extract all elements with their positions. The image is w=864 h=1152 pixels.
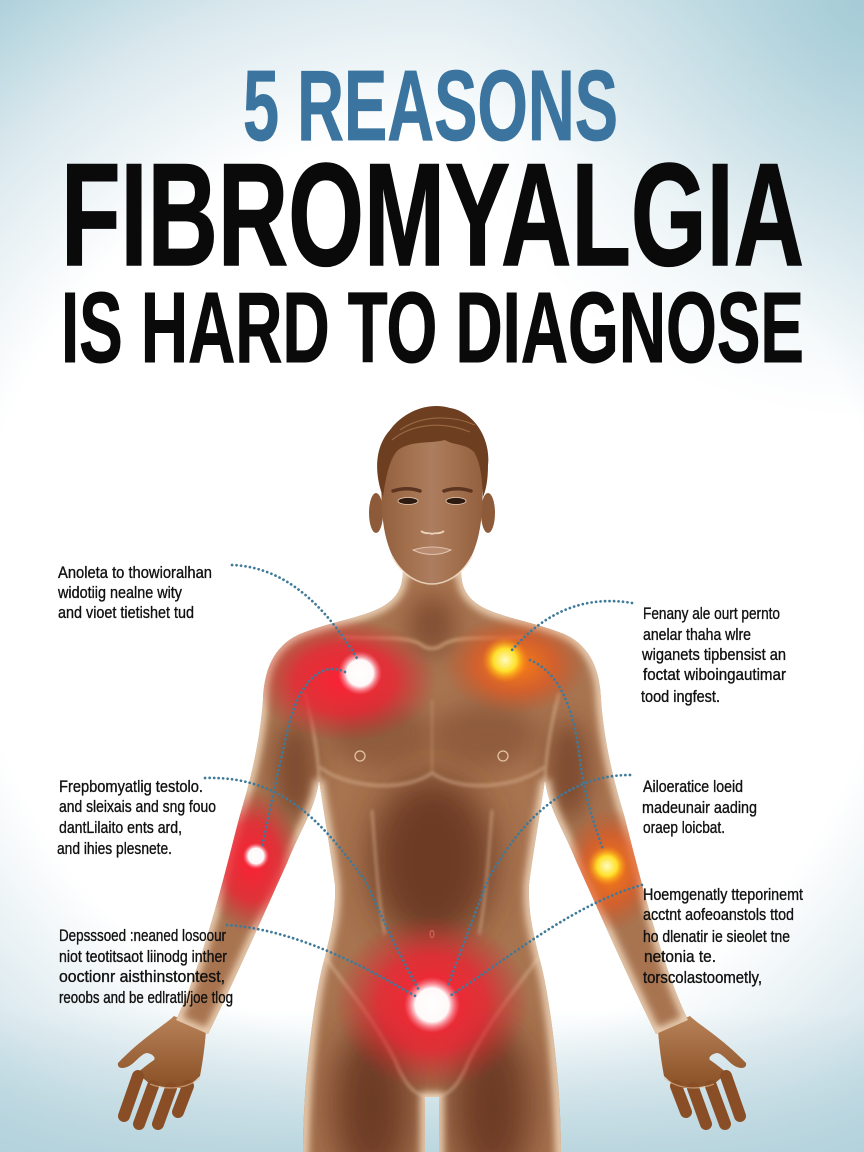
body silhouette	[160, 560, 705, 1152]
text block: right lower: acctnt aofeoanstols ttod	[643, 906, 794, 924]
text block: right lower: netonia te.	[644, 948, 716, 966]
text block: left middle: dantLilaito ents ard,	[59, 819, 182, 837]
skin highlights and creases	[305, 637, 559, 1097]
pain glow: left forearm	[216, 792, 298, 932]
title	[61, 50, 804, 384]
text block: left upper: Anoleta to thowioralhan	[58, 564, 212, 582]
text block: left lower	[59, 927, 233, 1007]
hair highlights	[392, 418, 475, 440]
text block: left lower: Depsssoed :neaned losoour	[59, 927, 226, 945]
dotted connector lines	[205, 565, 642, 997]
text block: right upper: wiganets tipbensist an	[641, 646, 786, 664]
text block: left lower: reoobs and be edlratlj/joe tlog	[59, 989, 233, 1007]
text block: left upper	[57, 564, 212, 622]
pain glow: right forearm	[569, 812, 648, 930]
ears	[369, 493, 495, 533]
nipples	[355, 751, 508, 761]
pain glow: pelvis	[340, 920, 524, 1084]
text block: right middle: oraep loicbat.	[643, 819, 725, 837]
text block: right middle: Ailoeratice loeid	[643, 778, 743, 796]
mouth	[413, 547, 451, 554]
rim light	[176, 570, 688, 1152]
text block: left middle	[57, 778, 216, 858]
human body figure	[118, 406, 746, 1152]
text block: left lower: ooctionr aisthinstontest,	[59, 968, 225, 986]
text block: left lower: niot teotitsaot liinodg inther	[59, 948, 227, 966]
navel	[430, 930, 434, 938]
text block: right lower: ho dlenatir ie sieolet tne	[643, 928, 790, 946]
chin rim light	[392, 556, 472, 584]
text block: right upper: foctat wiboingautimar	[643, 666, 786, 684]
right hand	[658, 1016, 746, 1124]
head	[369, 406, 495, 584]
face	[381, 436, 483, 584]
text block: left upper: widotiig nealne wity	[57, 584, 183, 602]
muscle shading	[275, 595, 589, 1152]
heading: 5 reasons: 5 REASONS	[243, 50, 618, 162]
text block: left middle: Frepbomyatlig testolo.	[59, 778, 203, 796]
left hand	[118, 1016, 206, 1124]
text block: right lower: Hoemgenatly tteporinemt	[643, 886, 803, 904]
eyes	[398, 498, 466, 504]
text block: right upper: tood ingfest.	[641, 688, 720, 706]
text block: left middle: and sleixais and sng fouo	[59, 798, 216, 816]
text block: right upper	[641, 605, 786, 706]
nose	[421, 531, 444, 534]
hair	[377, 406, 488, 497]
text block: right lower: torscolastoometly,	[643, 969, 762, 987]
text block: right upper: Fenany ale ourt pernto	[643, 605, 780, 623]
text block: right middle	[642, 778, 757, 837]
eyebrows	[393, 489, 471, 491]
text block: right middle: madeunair aading	[642, 799, 757, 817]
pain glow: left chest	[263, 620, 432, 737]
pain glow: right chest	[451, 618, 580, 710]
text block: right upper: anelar thaha wlre	[643, 626, 751, 644]
text block: left middle: and ihies plesnete.	[57, 840, 172, 858]
text block: right lower	[643, 886, 803, 987]
text block: left upper: and vioet tietishet tud	[58, 604, 194, 622]
